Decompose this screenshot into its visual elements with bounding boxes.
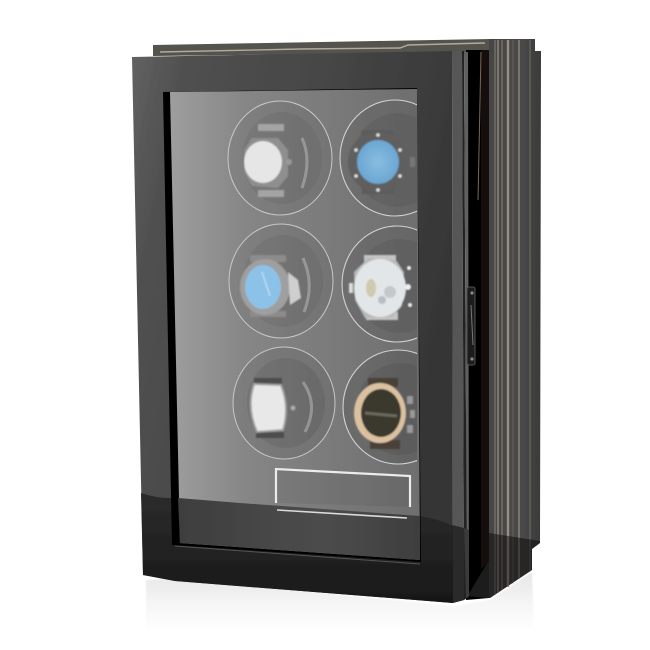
watch 3: blue dial, steel case (240, 255, 301, 317)
watch 2: blue dial, dark bezel (348, 130, 415, 194)
recessed black gap between door and body (466, 50, 489, 600)
ebony right side panel (489, 39, 541, 598)
drum 3 (229, 224, 333, 338)
display plate (276, 469, 410, 518)
watch 5: tonneau white dial (251, 378, 296, 438)
product illustration: six-watch winder cabinet (132, 39, 541, 608)
ebony top panel (153, 39, 490, 56)
watch 1: silver dial (244, 124, 292, 197)
drum 6 (342, 350, 417, 464)
glass panel (170, 89, 420, 564)
winder drums (228, 100, 417, 464)
wood grain stripes (495, 40, 530, 595)
drum 1 (228, 101, 332, 215)
drum 5 (233, 347, 335, 459)
drum 4 (342, 226, 417, 342)
glossy lower frame reflection (141, 493, 453, 603)
bottom frame highlight (175, 546, 420, 564)
watch 4: white chronograph (349, 255, 412, 320)
latch hardware (467, 287, 475, 365)
lower glass reflection (178, 498, 420, 560)
cabinet body group (132, 39, 541, 603)
black inner frame recess (163, 88, 421, 562)
stepped door edge layers (452, 51, 469, 603)
floor reflection (146, 572, 534, 632)
side lower reflection (489, 533, 540, 598)
drum 2 (340, 100, 417, 216)
door frame (132, 51, 453, 603)
watch 6: rose gold case, dark dial (354, 378, 415, 449)
